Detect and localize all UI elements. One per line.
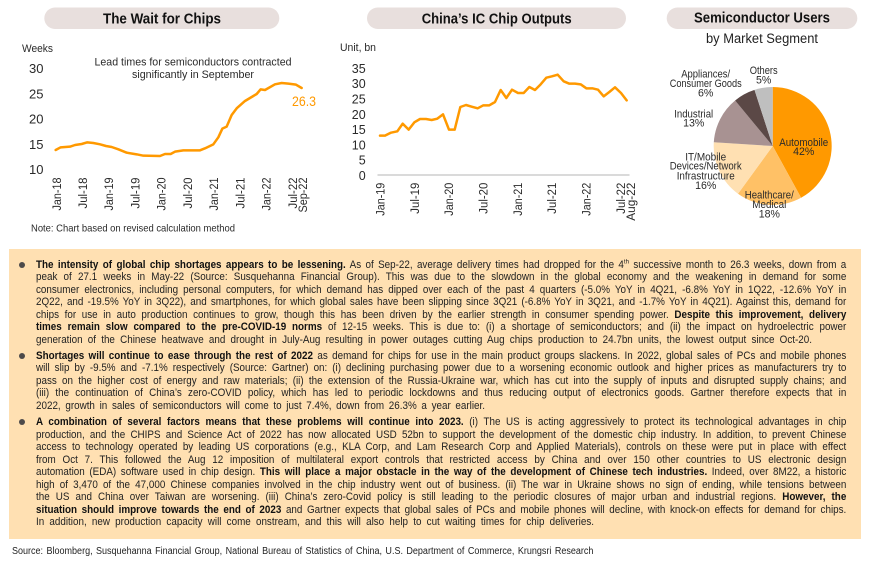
paragraph: problems continue into 2023: from Oct 7. This followed the Aug 12 imposition of multilateral export controls that restricted access by China and over 150 other countries to US electronic design: [36, 454, 846, 466]
paragraph: problems continue into 2023: A combination of several factors means that these problems will continue into 2023. (i) The US is acting aggressively to protect its technological advantages in chip: [36, 416, 846, 428]
x axis labels: Jul-21: [236, 178, 248, 208]
y axis labels: 10: [352, 138, 366, 152]
x axis labels: Jan-20: [444, 183, 456, 216]
x axis labels: Jul-22: [288, 178, 300, 208]
paragraph: shortages lessening: [19, 258, 846, 346]
pie labels: Devices/Network: [670, 161, 742, 173]
pie labels: Healthcare/: [745, 189, 794, 201]
y axis labels: 10: [29, 162, 44, 177]
x axis labels: Jul-19: [410, 183, 422, 214]
paragraph: shortages lessening: chips for use in auto production continues to grow, though this has been driven by the earlier strength in consumer spending power. Despite this improvement, delivery: [36, 309, 846, 321]
x axis labels: Jul-21: [547, 183, 559, 214]
pie labels: [670, 65, 828, 221]
x axis labels: Jan-20: [156, 178, 168, 210]
bullet: [19, 419, 25, 425]
y axis labels: 0: [359, 169, 366, 183]
x axis labels: [376, 183, 638, 221]
y axis labels: 25: [352, 92, 366, 106]
x axis labels: Jan-18: [52, 178, 64, 210]
pie labels: 6%: [698, 87, 714, 99]
y axis labels: 35: [352, 62, 366, 76]
y axis labels: 20: [29, 112, 44, 126]
heading: semiconductor users: [667, 8, 857, 29]
paragraph: shortages will ease: 2022, growth in sales of semiconductors will come to just 7.4%, down from 26.3% a year earlier.: [36, 400, 485, 412]
paragraph: shortages will ease: (iii) the continuation of China’s zero-COVID policy, which has led to periodic lockdowns and thus reducing output of electronics goods. Gartner therefore expects that in: [36, 387, 846, 399]
paragraph: problems continue into 2023: automation (EDA) software used in chip design. This will place a major obstacle in the way of the development of Chinese tech industries. Indeed, over 8M22, a historic: [36, 466, 846, 478]
paragraph: shortages will ease: [19, 350, 846, 412]
paragraph: problems continue into 2023: [19, 416, 846, 528]
y axis labels: 15: [29, 137, 44, 152]
y axis labels: 30: [352, 77, 366, 91]
x axis labels: Jul-18: [78, 178, 90, 208]
paragraph: problems continue into 2023: situation should improve towards the end of 2023 and Gartner expects that global sales of PCs and mobile phones will decline, with knock-on effects for demand for chips.: [36, 504, 846, 516]
panel: china's ic chip outputs: [340, 8, 638, 221]
pie labels: IT/Mobile: [685, 151, 726, 163]
chart note: Note: Chart based on revised calculation method: [31, 224, 235, 234]
paragraph: problems continue into 2023: production, and the CHIPS and Science Act of 2022 has now allocated USD 52bn to support the development of the domestic chip industry. In addition, to prevent Chinese: [36, 429, 846, 441]
y axis labels: 20: [352, 108, 366, 122]
y axis labels: 25: [29, 86, 44, 101]
paragraph: shortages lessening: consumer electronics, including personal computers, for which demand has dipped over each of the past 4 quarters (-5.0% YoY in 4Q21, -6.8% YoY in 1Q22, -12.6% YoY in: [36, 284, 846, 296]
pie labels: Consumer Goods: [670, 78, 742, 90]
y axis unit: unit, bn: Unit, bn: [340, 42, 376, 54]
y axis labels: 5: [359, 154, 366, 168]
bullet: [19, 262, 25, 268]
value label: 26.3: 26.3: [292, 93, 316, 109]
pie chart: market segments: [714, 87, 832, 205]
x axis labels: Jul-19: [130, 178, 142, 208]
x axis labels: Jul-20: [183, 178, 195, 208]
subheading: by market segment: by Market Segment: [706, 31, 818, 46]
pie labels: Appliances/: [681, 69, 730, 81]
panel: the wait for chips: [22, 8, 316, 234]
y axis unit: weeks: Weeks: [22, 43, 53, 55]
charts and titles: [22, 8, 858, 234]
x axis labels: Jan-19: [376, 183, 388, 216]
line chart: lead times: [56, 83, 302, 156]
x axis labels: Jan-21: [209, 178, 221, 210]
pie labels: Industrial: [674, 108, 713, 120]
annotation: lead times: significantly in September: [132, 69, 254, 81]
x axis labels: [52, 178, 310, 212]
heading: china's ic chip outputs: [367, 8, 626, 29]
annotation: lead times: Lead times for semiconductors contracted: [94, 56, 292, 68]
heading: the wait for chips: [44, 8, 279, 29]
pie labels: 16%: [695, 180, 717, 192]
x axis labels: Sep-22: [298, 178, 310, 212]
pie labels: 13%: [683, 118, 705, 130]
x axis labels: Aug-22: [626, 183, 638, 221]
paragraph: problems continue into 2023: access to technology operated by leading US corporations (e.g., KLA Corp, and Lam Research Corp and Applied Materials), controls on these were put in place with effect: [36, 441, 846, 453]
heading: the wait for chips: The Wait for Chips: [103, 11, 221, 27]
paragraph: shortages will ease: Shortages will continue to ease through the rest of 2022 as demand for chips for use in the main product groups slackens. In 2022, global sales of PCs and mobile phones: [36, 350, 846, 362]
paragraph: shortages lessening: times remain slow compared to the pre-COVID-19 norms of 12-15 weeks. This is due to: (i) a shortage of semiconductors; and (ii) the impact on hydroelectric power: [36, 321, 846, 333]
x axis labels: Jan-22: [262, 178, 274, 210]
pie labels: Automobile: [779, 137, 828, 149]
paragraph: problems continue into 2023: high of 3,470 of the 47,000 Chinese companies involved in the chip industry went out of business. (ii) The war in Ukraine shows no sign of ending, while tensions between: [36, 479, 846, 491]
heading: china's ic chip outputs: China’s IC Chip Outputs: [422, 11, 572, 27]
paragraph: shortages lessening: generation of the Chinese heatwave and drought in July-Aug resulting in power outages cutting Aug chips production to 24.7bn units, the lowest output since Oct-20.: [36, 334, 812, 346]
line chart: chip output: [380, 75, 627, 136]
heading: semiconductor users: Semiconductor Users: [694, 10, 830, 26]
x axis labels: Jul-22: [616, 183, 628, 214]
source line: Source: Bloomberg, Susquehanna Financial Group, National Bureau of Statistics of China, U.S. Department of Commerce, Krungsri Research: [12, 546, 593, 557]
x axis labels: Jan-22: [582, 183, 594, 216]
annotation: lead times: [94, 56, 292, 81]
pie labels: 18%: [759, 209, 780, 221]
paragraph: shortages lessening: peak of 27.1 weeks in May-22 (Source: Susquehanna Financial Group). This was due to the slowdown in the global economy and the weakening in demand for some: [36, 271, 846, 283]
x axis labels: Jan-21: [513, 183, 525, 216]
y axis labels: 15: [352, 123, 366, 137]
panel: semiconductor users: [667, 8, 857, 221]
paragraph: shortages will ease: will slip by -9.5% and -7.1% respectively (Source: Gartner) on: (i) declining purchasing power due to a worsening economic outlook and higher prices as manufacturers try to: [36, 362, 846, 374]
paragraph: problems continue into 2023: the US and China over Taiwan are worsening. (iii) China’s zero-Covid policy is still leading to the periodic closures of major urban and industrial regions. However, the: [36, 491, 846, 503]
y axis labels: [29, 61, 44, 177]
pie labels: Infrastructure: [677, 171, 735, 183]
pie labels: 5%: [756, 74, 772, 86]
paragraph: shortages lessening: 2Q22, and -19.5% YoY in 3Q22), and smartphones, for which global sales have been slipping since 3Q21 (-6.8% YoY in 3Q21, and -1.7% YoY in 4Q21). Against this, demand for: [36, 296, 846, 308]
pie labels: Medical: [752, 199, 786, 211]
x axis labels: Jan-19: [104, 178, 116, 210]
y axis labels: 30: [29, 61, 44, 76]
pie labels: Others: [750, 65, 778, 77]
paragraph: problems continue into 2023: In addition, new production capacity will come onstream, and this will also help to cut waiting times for chip deliveries.: [36, 516, 594, 528]
bullet: [19, 353, 25, 359]
panel: commentary text: [8, 249, 860, 539]
paragraph: shortages lessening: The intensity of global chip shortages appears to be lessening. As of Sep-22, average delivery times had dropped for the 4th successive month to 26.3 weeks, down from a: [36, 258, 846, 271]
paragraph: shortages will ease: pass on the higher cost of energy and raw materials; (ii) the extension of the Russia-Ukraine war, which has cut into the supply of inputs and disrupted supply chains; and: [36, 375, 846, 387]
x axis line: [378, 174, 630, 176]
pie labels: 42%: [793, 146, 815, 158]
x axis labels: Jul-20: [478, 183, 490, 214]
y axis labels: [352, 62, 366, 183]
